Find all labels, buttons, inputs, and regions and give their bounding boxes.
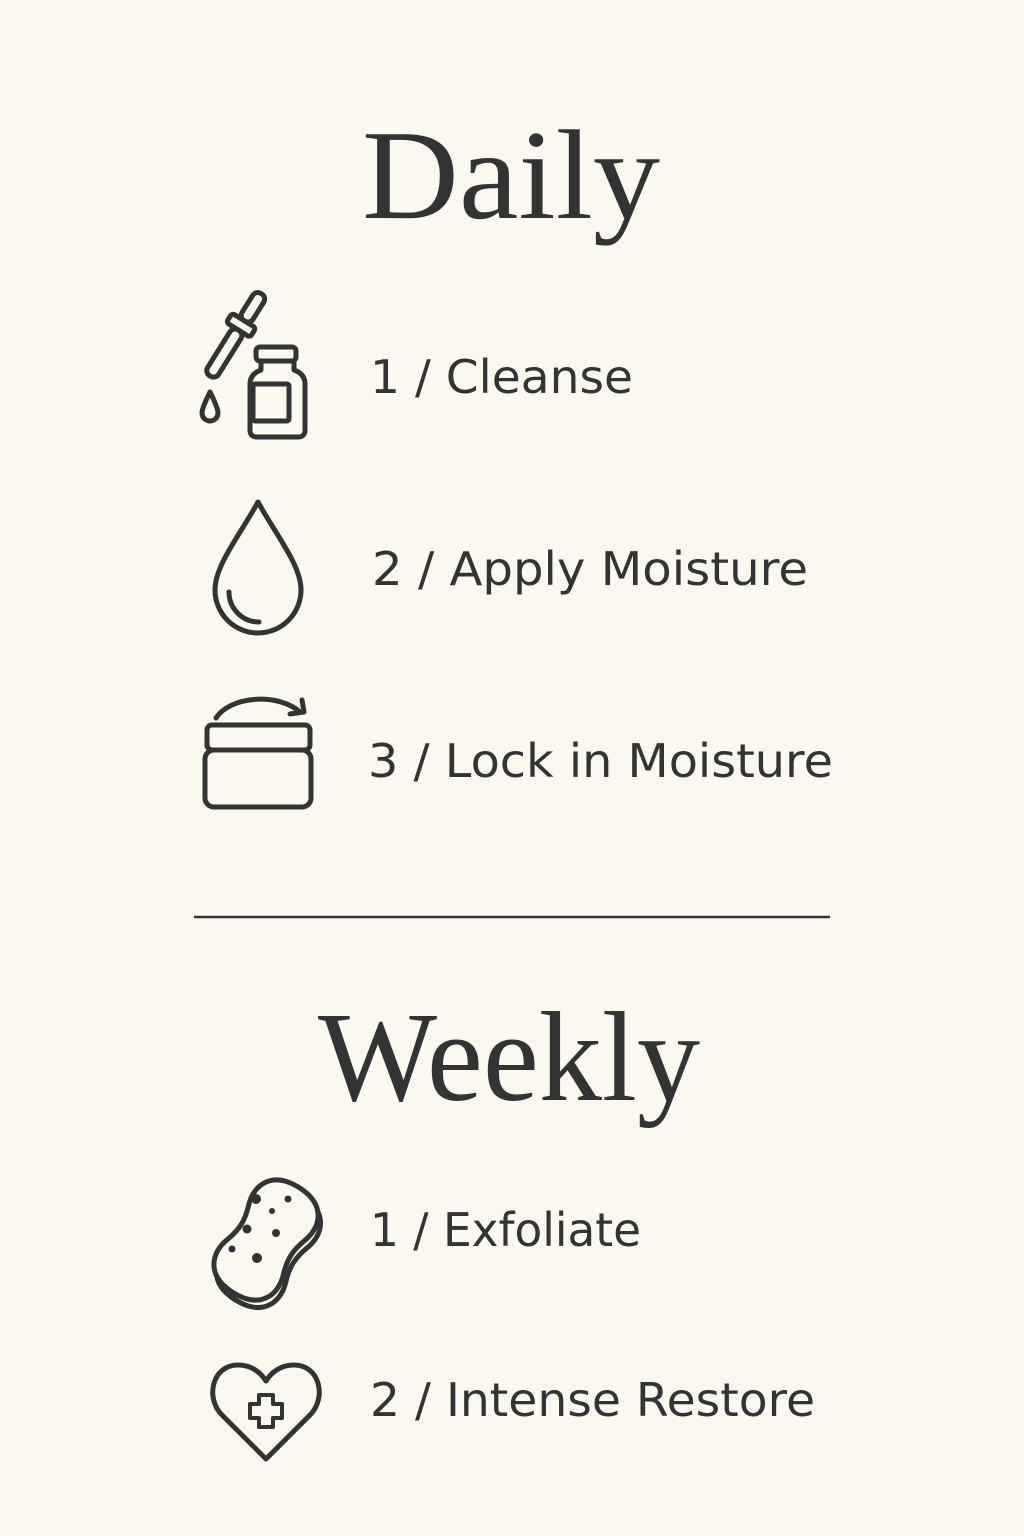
icon: jar with arrow — [205, 699, 311, 807]
step: 3 Lock in Moisture: 3 / Lock in Moisture — [368, 734, 833, 788]
step: 1 Cleanse: 1 / Cleanse — [370, 350, 633, 404]
icon: sponge — [201, 1169, 334, 1319]
icon: dropper and bottle — [198, 286, 305, 437]
icon: water drop — [215, 502, 301, 633]
title: Weekly: Weekly — [318, 986, 700, 1128]
icon: heart with cross — [213, 1365, 319, 1459]
step: 1 Exfoliate: 1 / Exfoliate — [370, 1203, 641, 1257]
step: 2 Intense Restore: 2 / Intense Restore — [370, 1373, 815, 1427]
step: 2 Apply Moisture: 2 / Apply Moisture — [372, 542, 808, 596]
title: Daily: Daily — [362, 104, 660, 246]
